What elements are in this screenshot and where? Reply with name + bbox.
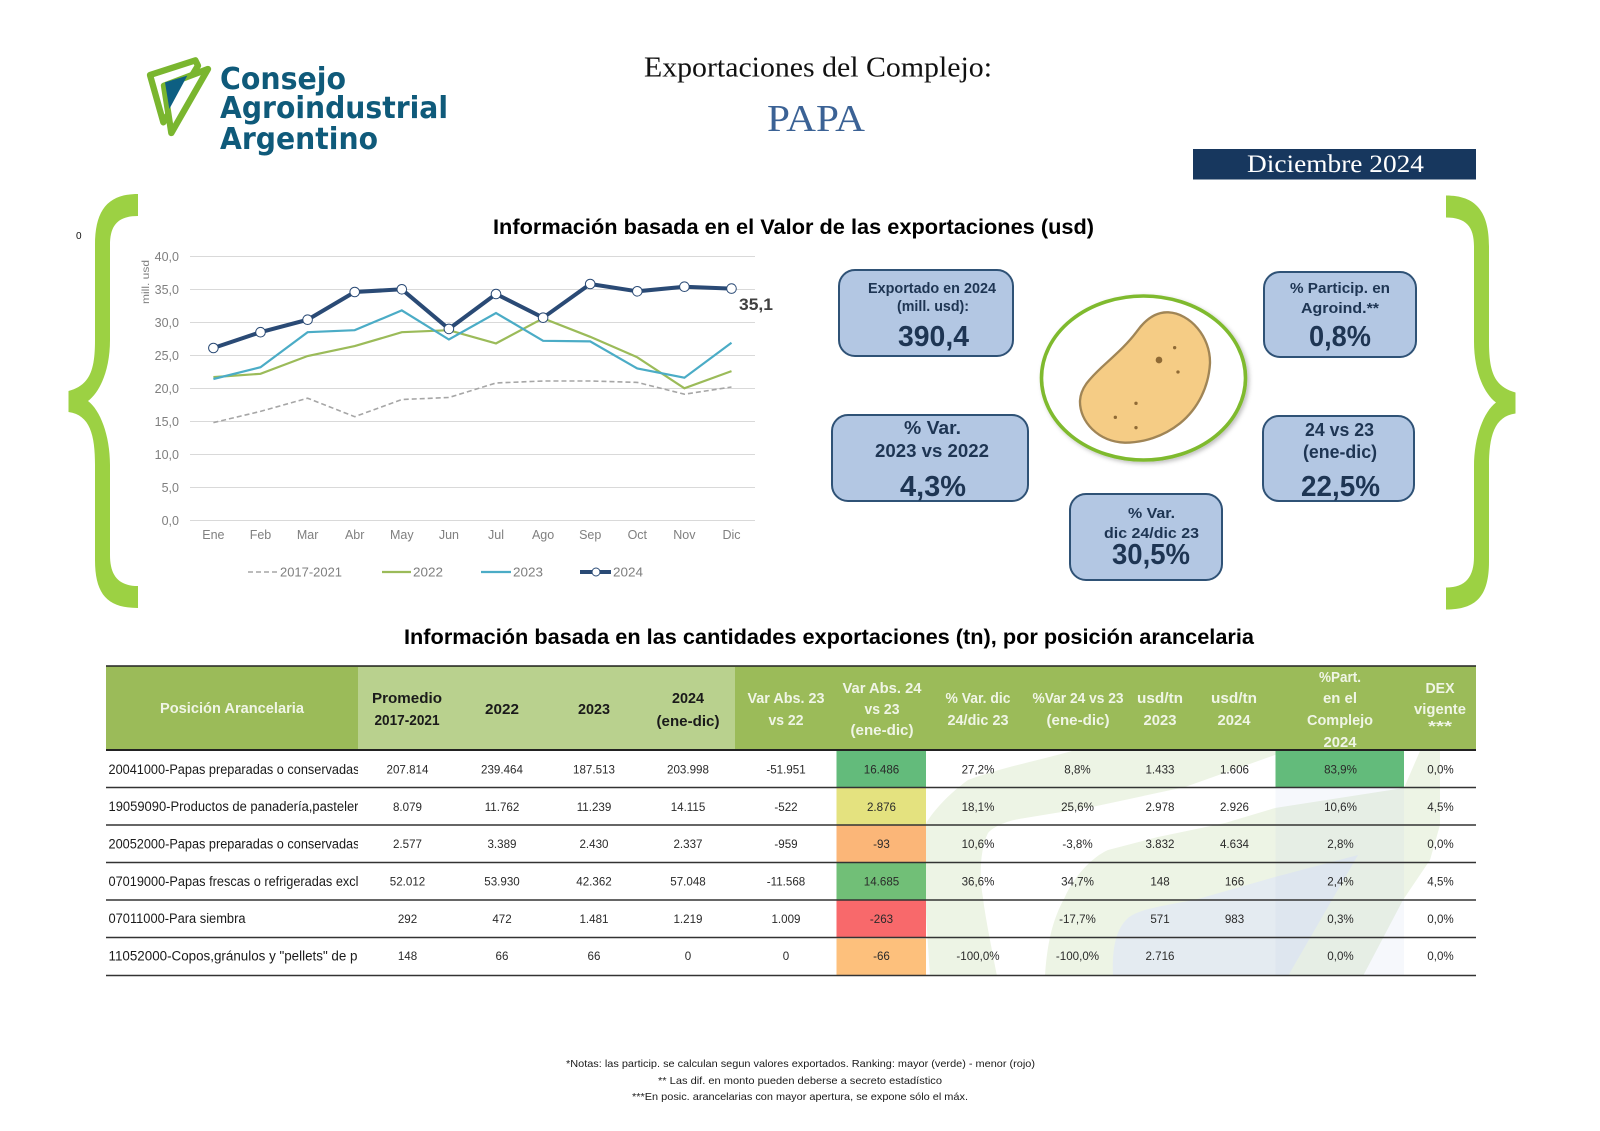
table row: 19059090: 2.876 [867,801,896,814]
table header: Var Abs. 24 [842,681,922,697]
table row: 20052000: 10,6% [962,838,994,851]
table header: Promedio [372,691,442,707]
table row: 20041000: 187.513 [573,764,615,776]
footnotes: ***En posic. arancelarias con mayor apertura, se expone sólo el máx. [632,1091,968,1103]
table row: 19059090: 10,6% [1324,801,1357,814]
x axis labels: Feb [250,528,271,542]
y axis labels: 30,0 [155,316,179,330]
kpi: dic 24 vs dic 23: dic 24/dic 23 [1104,525,1199,542]
table row: 19059090: 14.115 [671,801,705,814]
table header: DEX [1426,681,1455,697]
table row: 20052000: 0,0% [1427,838,1454,851]
table header: 2023 [1144,713,1176,729]
table row: 11052000 [110,950,1454,964]
kpi: dic 24 vs dic 23: % Var. [1128,505,1175,522]
kpi: 24 vs 23: (ene-dic) [1303,442,1377,462]
table row: 19059090: 11.239 [577,801,611,814]
kpi: 24 vs 23 [1263,416,1414,503]
table row: 19059090: 11.762 [485,801,519,814]
logo wordmark [220,62,448,157]
table row: 07019000: 4,5% [1427,876,1454,888]
table row: 20041000: 239.464 [481,764,523,776]
table row: 19059090: 2.926 [1220,801,1249,814]
table row: 07019000: 2,4% [1327,876,1354,888]
table header [106,666,1476,751]
y axis title: mill. usd [140,260,152,304]
y axis labels: 35,0 [155,283,179,297]
table row: 07019000: 148 [1150,876,1170,888]
right green brace [1446,196,1516,610]
table header: %Var 24 vs 23 [1032,691,1124,707]
x axis labels: Nov [673,528,696,542]
x axis labels: Abr [345,528,364,542]
series 2023 [213,310,731,379]
date banner: Diciembre 2024 [1247,151,1425,178]
table row: 07011000: 1.009 [771,913,801,926]
table row: 07011000: 0,3% [1327,913,1354,926]
x axis labels: Dic [722,528,741,542]
x axis labels [202,528,741,542]
title: Exportaciones del Complejo: [644,52,992,84]
x axis labels: Oct [628,528,648,542]
table header: Var Abs. 23 [748,691,824,707]
table row: 11052000: 66 [588,950,600,963]
table row: 07011000: 983 [1225,913,1244,926]
table row: 11052000: -100,0% [956,950,1000,963]
table row: 20041000: 1.606 [1220,764,1249,776]
kpi: variacion 2023 vs 2022: % Var. [904,418,961,438]
table row: 11052000: 0 [783,950,789,963]
table row: 20052000: -3,8% [1062,838,1093,851]
table row: 20052000: 2.430 [579,838,609,851]
table row: 20041000: 207.814 [387,764,429,776]
y axis labels: 25,0 [155,349,179,363]
table header: 2024 [1218,713,1250,729]
table header: %Part. [1319,670,1361,686]
logo wordmark: Consejo [220,62,346,97]
table row: 11052000: 0 [685,950,691,963]
table row: 07019000 [109,876,1454,889]
table row: 07011000: 1.219 [673,913,703,926]
table row: 07011000: 571 [1150,913,1170,926]
table header: % Var. dic [946,691,1010,707]
table header: (ene-dic) [850,723,914,739]
table row: 07019000: 07019000-Papas frescas o refrigeradas excl [108,874,358,889]
kpi: exportado en 2024: (mill. usd): [897,298,969,315]
series 2017-2021 [213,381,731,423]
heading: quantity section: Información basada en las cantidades exportaciones (tn), por posición arancelaria [404,625,1255,649]
table header: 2024 [1324,735,1356,751]
table row: 11052000: 0,0% [1427,950,1454,963]
table row: 07011000: 07011000-Para siembra [108,911,246,926]
table row: 07011000: -263 [870,913,893,926]
kpi: variacion 2023 vs 2022: 2023 vs 2022 [875,441,989,461]
table row: 11052000: 148 [398,950,417,963]
x axis labels: May [390,528,414,542]
table row: 20052000: 2.577 [393,838,422,851]
table row: 20041000: 1.433 [1145,764,1175,776]
table row: 07019000: 53.930 [484,876,520,888]
kpi: variacion 2023 vs 2022: 4,3% [900,471,966,503]
table row: 20052000: 2,8% [1327,838,1354,851]
table row: 07019000: 52.012 [390,876,425,888]
series 2022 [213,318,731,388]
table header: 24/dic 23 [948,713,1008,729]
legend: 2023 [513,566,543,580]
table row: 07019000: -11.568 [767,876,805,888]
table row: 20041000: 0,0% [1427,764,1454,776]
y axis labels: 0,0 [162,514,179,528]
table header: *** [1428,719,1452,735]
table row: 11052000: 66 [496,950,508,963]
table row: 07019000: 14.685 [864,876,899,888]
table header: 2024 [672,691,704,707]
kpi: dic 24 vs dic 23 [1070,494,1222,580]
table row lines [106,788,1476,976]
table header: 2023 [578,702,610,718]
last value label: 35,1 [739,296,773,314]
table row: 07019000: 42.362 [576,876,612,888]
kpi: exportado en 2024: 390,4 [898,321,969,353]
y axis labels: 5,0 [162,481,179,495]
kpi: exportado en 2024: Exportado en 2024 [868,280,997,297]
legend: 2024 [613,566,643,580]
table row: 20052000 [109,838,1454,852]
table header: usd/tn [1211,691,1257,707]
table row: 20041000: 27,2% [962,764,994,776]
table row: 07019000: 34,7% [1061,876,1094,888]
kpi: dic 24 vs dic 23: 30,5% [1112,539,1190,571]
legend [248,566,643,580]
table row: 20052000: 3.832 [1145,838,1175,851]
table row: 20041000: 83,9% [1324,764,1357,776]
table row: 20052000: -93 [873,838,890,851]
kpi: 24 vs 23: 24 vs 23 [1305,420,1374,440]
table header: 2017-2021 [374,713,440,729]
table heat cells [836,751,1404,976]
table header: (ene-dic) [656,714,720,730]
table header: Posición Arancelaria [160,701,305,717]
table row: 11052000: -100,0% [1056,950,1099,963]
logo wordmark: Agroindustrial [220,91,448,126]
x axis labels: Jun [439,528,459,542]
table header: vs 22 [768,713,804,729]
y axis labels: 15,0 [155,415,179,429]
kpi: participacion en agroindustria [1264,272,1416,357]
table row: 20052000: -959 [774,838,798,851]
y axis labels: 10,0 [155,448,179,462]
table row: 19059090: -522 [774,801,798,814]
table row: 20041000 [109,764,1454,777]
icon: potato in green ring [1042,296,1246,460]
footnotes [566,1058,1035,1103]
x axis labels: Sep [579,528,601,542]
x axis labels: Mar [297,528,318,542]
table row: 20052000: 20052000-Papas preparadas o conservadas [108,836,360,852]
x axis labels: Jul [488,528,504,542]
table row: 07019000: 36,6% [962,876,994,888]
y axis labels: 40,0 [155,250,179,264]
logo wordmark: Argentino [220,122,378,157]
logo: Consejo Agroindustrial Argentino [150,60,448,157]
kpi: participacion en agroindustria: Agroind.** [1301,300,1379,317]
series 2024 [209,279,736,353]
kpi: variacion 2023 vs 2022 [832,415,1028,503]
table row: 20052000: 2.337 [673,838,703,851]
kpi: participacion en agroindustria: % Particip. en [1290,280,1390,297]
table row: 20041000: 20041000-Papas preparadas o conservadas [108,762,360,777]
table row: 07011000: 292 [398,913,417,926]
table row: 11052000: 2.716 [1145,950,1175,963]
y axis labels [155,250,179,528]
left green brace [68,194,138,608]
table row: 20052000: 4.634 [1220,838,1250,851]
table row: 20041000: 8,8% [1064,764,1091,776]
table row: 19059090: 25,6% [1061,801,1094,814]
icon: logo mark [150,60,208,133]
kpi: exportado en 2024 [839,270,1013,356]
stray zero label: 0 [76,231,82,242]
legend: 2022 [413,566,443,580]
table row: 19059090: 19059090-Productos de panadería,pasteler [108,799,359,814]
line chart: exports by month [140,250,773,580]
table header: usd/tn [1137,691,1183,707]
table row: 19059090: 18,1% [962,801,994,814]
table row: 20041000: 203.998 [667,764,709,776]
footnotes: ** Las dif. en monto pueden deberse a secreto estadístico [658,1075,942,1087]
table row: 07019000: 166 [1225,876,1244,888]
table row: 20041000: -51.951 [766,764,806,776]
table header: Complejo [1307,713,1373,729]
table row: 11052000: 11052000-Copos,gránulos y "pellets" de p [108,948,358,964]
x axis labels: Ene [202,528,225,542]
table header: vs 23 [864,702,900,718]
legend: 2017-2021 [280,566,342,580]
table row: 19059090: 2.978 [1145,801,1175,814]
y axis labels: 20,0 [155,382,179,396]
table row: 19059090 [110,801,1454,814]
watermark: faint logo behind table [924,751,1440,976]
table row: 20052000: 3.389 [487,838,517,851]
table header: 2022 [485,702,519,718]
table row: 11052000: -66 [873,950,890,963]
footnotes: *Notas: las particip. se calculan segun valores exportados. Ranking: mayor (verde) - menor (rojo) [566,1058,1035,1070]
product name: PAPA: PAPA [767,98,866,140]
heading: value section: Información basada en el Valor de las exportaciones (usd) [493,215,1094,239]
x axis labels: Ago [532,528,554,542]
table header: en el [1323,691,1357,707]
table row: 07011000: 0,0% [1427,913,1454,926]
table row: 19059090: 8.079 [393,801,422,814]
table row: 19059090: 4,5% [1427,801,1454,814]
date banner [1193,149,1476,180]
table row: 07019000: 57.048 [670,876,706,888]
table header: (ene-dic) [1046,713,1110,729]
table row: 07011000 [108,911,1454,926]
table row: 07011000: -17,7% [1059,913,1096,926]
kpi: 24 vs 23: 22,5% [1301,471,1380,503]
table row: 11052000: 0,0% [1327,950,1354,963]
table row: 20041000: 16.486 [864,764,899,776]
table row: 07011000: 1.481 [579,913,609,926]
kpi: participacion en agroindustria: 0,8% [1309,321,1371,353]
table header: vigente [1414,702,1466,718]
table row: 07011000: 472 [492,913,512,926]
